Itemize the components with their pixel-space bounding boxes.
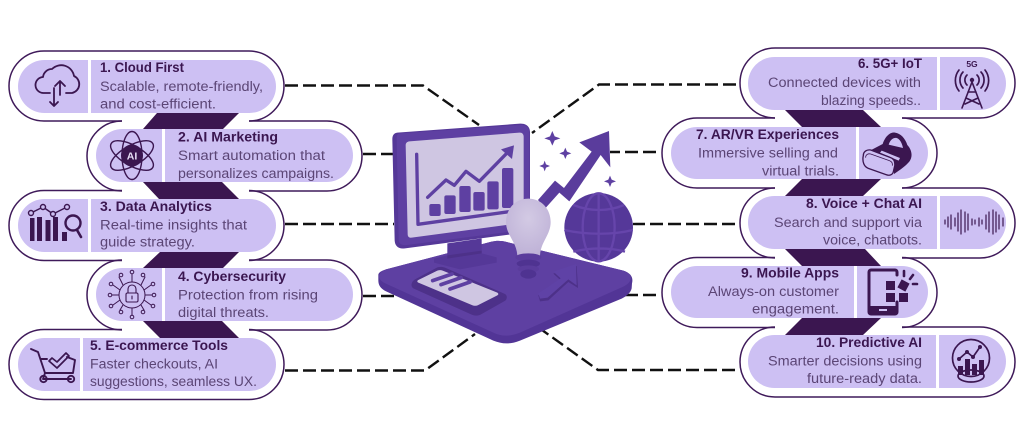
panel: 7 AR/VR Experiences [671,127,928,179]
panel: 1 Cloud First [18,60,276,113]
central illustration: computer, bulb, globe, growth arrow on a platform [378,124,633,343]
icon: cloud [35,65,79,106]
text block: and cost-efficient. [100,96,216,112]
text block: Search and support via [774,215,923,230]
sparkles [539,131,616,187]
heading: 10. Predictive AI [816,335,922,350]
text block: voice, chatbots. [823,232,922,248]
monitor stand [434,238,497,269]
text block: Protection from rising [178,288,318,302]
platform [378,241,632,343]
text block: virtual trials. [762,164,839,178]
text block: suggestions, seamless UX. [90,374,257,389]
text block: Faster checkouts, AI [90,356,218,372]
heading: 7. AR/VR Experiences [696,127,839,142]
icon: predictive globe [952,340,990,382]
heading: 5. E-commerce Tools [90,338,228,353]
chart axes [417,154,517,224]
screen [406,133,524,238]
panel: 8 Voice + Chat AI [748,196,1006,249]
heading: 8. Voice + Chat AI [806,196,922,211]
icon: circuit lock [108,270,156,319]
dashed connector lines [285,84,736,370]
trend line [428,152,508,197]
heading: 1. Cloud First [100,60,184,75]
icon: sound wave [945,210,1003,234]
text block: Always-on customer [708,284,840,299]
panel: 4 Cybersecurity [96,268,353,321]
icon: 5G tower [955,59,989,108]
panel: 2 AI Marketing [96,129,353,182]
globe [564,193,633,262]
panel: 10 Predictive AI [748,335,1006,388]
heading: 9. Mobile Apps [741,266,839,280]
text block: Smarter decisions using [768,354,922,368]
icon: AI atom [106,132,158,180]
text block: Smart automation that [178,148,325,163]
heading: 6. 5G+ IoT [858,56,923,71]
text block: Scalable, remote-friendly, [100,79,263,94]
text block: engagement. [752,302,839,316]
growth arrow [538,131,610,209]
text block: Connected devices with [768,75,921,90]
text block: Real-time insights that [100,218,247,232]
panel: 5 E-commerce Tools [18,338,276,391]
icon: VR headset [863,133,912,175]
icon: AI atom: AI [127,150,137,162]
small arrow on platform [538,264,578,301]
dark link bands between pills [143,110,881,338]
icon: shopping cart [31,349,75,382]
panel: 9 Mobile Apps [671,266,928,318]
text block: blazing speeds.. [821,93,921,108]
monitor [392,124,530,249]
text block: future-ready data. [807,371,922,386]
heading: 3. Data Analytics [100,199,212,214]
chart bars [429,168,513,216]
heading: 2. AI Marketing [178,130,278,144]
text block: Immersive selling and [698,146,838,160]
icon: 5G tower: 5G [966,59,978,69]
heading: 4. Cybersecurity [178,269,286,284]
text block: personalizes campaigns. [178,166,334,181]
panel: 6 5G+ IoT [748,56,1006,110]
phone on platform [412,267,507,316]
text block: guide strategy. [100,234,195,250]
icon: mobile apps [869,270,917,314]
panel: 3 Data Analytics [18,199,276,252]
icon: analytics [28,204,81,241]
light bulb [506,199,551,279]
pill outlines [9,48,1015,400]
text block: digital threats. [178,305,269,320]
